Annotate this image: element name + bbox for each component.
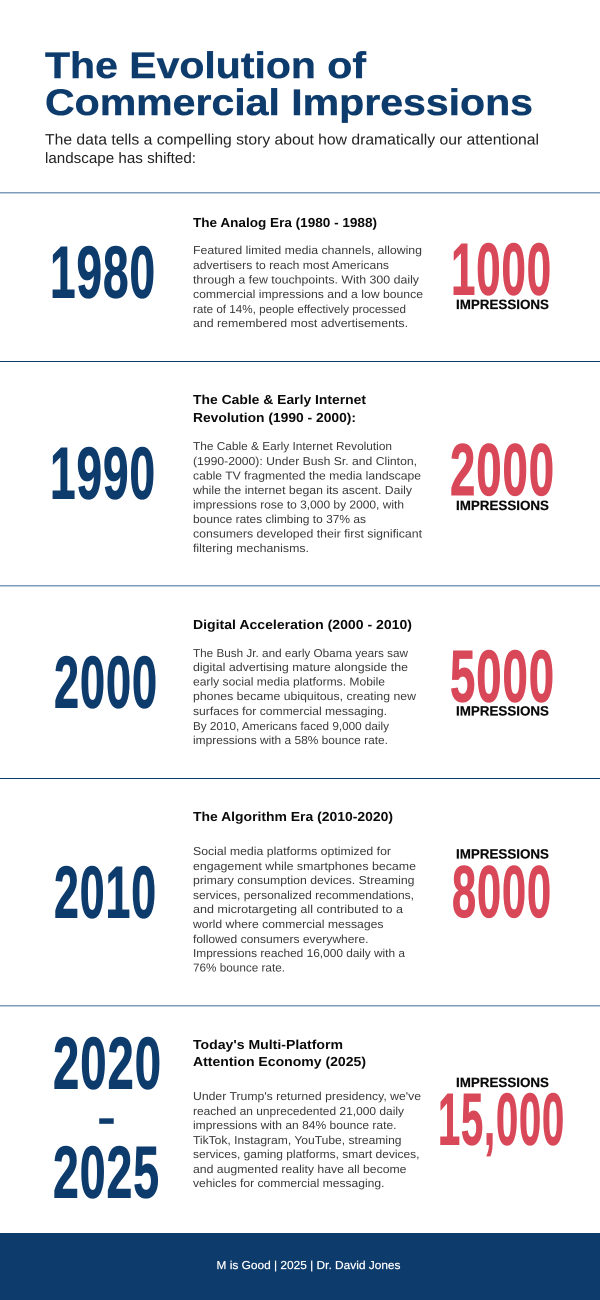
body text: phones became ubiquitous, creating new <box>193 691 417 703</box>
heading: Attention Economy (2025) <box>193 1054 366 1069</box>
body text: The Cable & Early Internet Revolution <box>193 441 392 453</box>
intro text: The data tells a compelling story about how dramatically our attentional <box>45 132 539 148</box>
year 1980: 1980 <box>50 230 156 314</box>
impressions 2000: IMPRESSIONS <box>456 498 549 513</box>
body text: early social media platforms. Mobile <box>193 676 385 688</box>
footer bar <box>0 1233 600 1300</box>
heading: Today's Multi-Platform <box>193 1037 343 1052</box>
panel: 1980 analog era <box>50 215 552 330</box>
body text <box>193 1091 421 1190</box>
body text: services, gaming platforms, smart devices, <box>193 1149 420 1161</box>
body text: digital advertising mature alongside the <box>193 662 408 674</box>
panel: 1990 cable and early internet <box>50 392 555 555</box>
impressions 8000 <box>452 846 552 933</box>
body text: surfaces for commercial messaging. <box>193 706 387 718</box>
body text: through a few touchpoints. With 300 daily <box>193 274 419 286</box>
panel: 2000 digital acceleration <box>54 617 555 747</box>
body text: impressions with a 58% bounce rate. <box>193 735 388 747</box>
body text: rate of 14%, people effectively processed <box>193 304 406 316</box>
impressions 1000 <box>451 228 552 312</box>
impressions 5000: IMPRESSIONS <box>456 704 549 718</box>
body text: world where commercial messages <box>192 919 384 931</box>
title: The Evolution of <box>45 45 367 86</box>
body text: 76% bounce rate. <box>193 962 285 974</box>
body text: services, personalized recommendations, <box>193 890 414 902</box>
year range 2020 - 2025: 2025 <box>53 1130 160 1214</box>
body text: Social media platforms optimized for <box>193 846 391 858</box>
title: Commercial Impressions <box>45 82 533 123</box>
body text: (1990-2000): Under Bush Sr. and Clinton, <box>193 456 417 468</box>
body text: filtering mechanisms. <box>193 543 309 555</box>
year range 2020 - 2025 <box>53 1022 162 1214</box>
body text: By 2010, Americans faced 9,000 daily <box>193 721 389 733</box>
year 2000: 2000 <box>54 640 158 724</box>
body text <box>193 245 423 330</box>
body text: and microtargeting all contributed to a <box>193 904 404 916</box>
body text: bounce rates climbing to 37% as <box>193 514 366 526</box>
body text: The Bush Jr. and early Obama years saw <box>193 648 409 660</box>
heading: Digital Acceleration (2000 - 2010) <box>193 617 412 632</box>
heading: The Algorithm Era (2010-2020) <box>193 809 393 824</box>
heading: The Analog Era (1980 - 1988) <box>193 215 377 230</box>
body text: Impressions reached 16,000 daily with a <box>193 948 406 960</box>
impressions 15,000: IMPRESSIONS <box>456 1075 549 1090</box>
body text <box>192 441 423 555</box>
body text: impressions rose to 3,000 by 2000, with <box>193 500 404 512</box>
body text: cable TV fragmented the media landscape <box>193 470 421 482</box>
body text: Featured limited media channels, allowing <box>193 245 422 257</box>
body text: and augmented reality have all become <box>193 1164 406 1176</box>
body text: consumers developed their first significant <box>193 528 423 540</box>
year 1990: 1990 <box>50 432 156 514</box>
panel: 2010 algorithm era <box>54 809 552 974</box>
panel: 2020-2025 attention economy <box>53 1022 565 1214</box>
body text <box>193 648 417 747</box>
body text: and remembered most advertisements. <box>193 318 408 330</box>
footer credit: M is Good | 2025 | Dr. David Jones <box>216 1260 401 1272</box>
body text: advertisers to reach most Americans <box>193 260 389 272</box>
body text: TikTok, Instagram, YouTube, streaming <box>193 1135 402 1147</box>
body text: impressions with an 84% bounce rate. <box>193 1120 396 1132</box>
impressions 8000: IMPRESSIONS <box>456 846 549 862</box>
body text: vehicles for commercial messaging. <box>193 1178 384 1190</box>
body text: while the internet began its ascent. Daily <box>192 485 412 497</box>
intro text <box>45 132 539 167</box>
year range 2020 - 2025: 2020 <box>53 1022 162 1104</box>
heading: Revolution (1990 - 2000): <box>193 410 356 425</box>
heading <box>193 392 367 425</box>
body text: primary consumption devices. Streaming <box>193 875 414 887</box>
heading <box>193 1037 366 1069</box>
intro text: landscape has shifted: <box>45 150 196 167</box>
body text: commercial impressions and a low bounce <box>193 289 423 301</box>
impressions 5000 <box>450 634 555 718</box>
body text <box>192 846 416 974</box>
impressions 1000: IMPRESSIONS <box>456 297 549 312</box>
title <box>45 45 533 123</box>
body text: engagement while smartphones became <box>193 861 416 873</box>
year range 2020 - 2025: - <box>97 1091 116 1143</box>
heading: The Cable & Early Internet <box>193 392 367 407</box>
body text: reached an unprecedented 21,000 daily <box>193 1106 404 1118</box>
body text: Under Trump's returned presidency, we've <box>193 1091 421 1103</box>
impressions 2000 <box>450 428 555 513</box>
year 2010: 2010 <box>54 850 157 934</box>
body text: followed consumers everywhere. <box>193 934 368 946</box>
